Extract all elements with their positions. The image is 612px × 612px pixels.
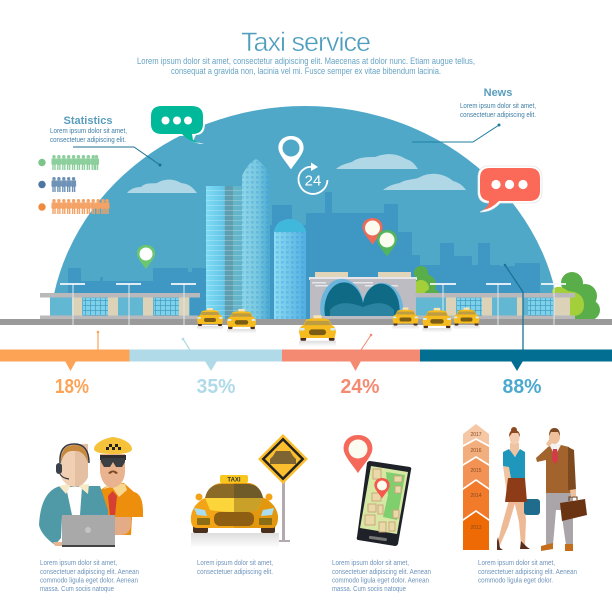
map pin: green	[137, 245, 155, 269]
text block 4: consectetuer adipiscing elit. Aenean	[478, 569, 577, 576]
text block 1: consectetuer adipiscing elit. Aenean	[40, 569, 139, 576]
text block 4: commodo ligula eget dolor.	[478, 578, 553, 584]
centre terminal	[309, 272, 417, 320]
tower right	[274, 219, 306, 320]
statistics leader line	[73, 147, 161, 166]
icon: businesswoman	[497, 427, 540, 550]
subtitle	[137, 56, 475, 76]
icon: big taxi	[191, 475, 279, 548]
text block 3	[332, 560, 431, 593]
map pin: white with 24h: 24	[305, 172, 321, 190]
icon: operator	[39, 444, 115, 547]
text block 3: consectetuer adipiscing elit. Aenean	[332, 569, 431, 576]
news heading: News	[484, 87, 512, 99]
map pin: white with 24h	[278, 136, 328, 194]
tower left	[206, 186, 243, 320]
map pin: red	[362, 218, 383, 245]
icon: smartphone with map	[344, 435, 411, 546]
subtitle: consequat a gravida non, lacinia vel mi. Fusce semper ex vitae bibendum lacinia.	[171, 66, 441, 76]
icon: big taxi: TAXI	[227, 478, 241, 484]
icon: driver	[94, 437, 143, 535]
bushes	[413, 266, 600, 320]
percent 88: 88%	[502, 376, 542, 398]
percent 24: 24%	[340, 376, 380, 398]
statistics heading: Statistics	[64, 115, 112, 127]
text block 1: massa. Cum sociis natoque	[40, 586, 114, 593]
percent 35: 35%	[196, 376, 236, 398]
connector lines	[97, 264, 523, 350]
news text: Lorem ipsum dolor sit amet,	[460, 103, 536, 110]
text block 1	[40, 560, 139, 593]
statistics text	[50, 128, 127, 144]
right terminal	[415, 293, 575, 320]
icon: year arrow stack: 2016	[470, 448, 482, 454]
segmented bar	[0, 350, 612, 371]
news leader line	[412, 124, 500, 142]
text block 1: commodo ligula eget dolor. Aenean	[40, 578, 138, 584]
icon: year arrow stack: 2015	[470, 468, 482, 474]
news text	[460, 103, 536, 119]
text block 2: consectetuer adipiscing elit.	[197, 569, 273, 576]
map pin: green 2	[377, 230, 397, 257]
skyline	[68, 192, 540, 320]
icon: year arrow stack	[463, 424, 489, 550]
text block 4: Lorem ipsum dolor sit amet,	[478, 560, 555, 567]
icon: businessman	[536, 428, 587, 551]
title: Taxi service	[241, 27, 371, 57]
statistics text: consectetuer adipiscing elit.	[50, 137, 126, 144]
city dome	[0, 106, 612, 325]
news text: consectetuer adipiscing elit.	[460, 112, 536, 119]
text block 4	[478, 560, 577, 584]
subtitle: Lorem ipsum dolor sit amet, consectetur adipiscing elit. Maecenas at dolor nunc. Etiam augue tellus,	[137, 56, 475, 66]
text block 2: Lorem ipsum dolor sit amet,	[197, 560, 273, 567]
people chart orange	[38, 199, 110, 214]
text block 3: massa. Cum sociis natoque	[332, 586, 406, 593]
people chart blue	[38, 177, 76, 192]
statistics text: Lorem ipsum dolor sit amet,	[50, 128, 127, 135]
icon: year arrow stack: 2013	[470, 525, 482, 531]
percent 18: 18%	[55, 376, 89, 398]
clouds	[127, 154, 466, 193]
icon: year arrow stack: 2017	[470, 432, 482, 438]
tower centre	[242, 159, 270, 320]
icon: taxi sign	[258, 434, 308, 542]
taxis on road	[197, 308, 480, 346]
text block 3: Lorem ipsum dolor sit amet,	[332, 560, 409, 567]
people chart green	[38, 155, 99, 170]
text block 3: commodo ligula eget dolor. Aenean	[332, 578, 429, 584]
street lamps	[60, 284, 566, 325]
icon: year arrow stack: 2014	[470, 493, 482, 499]
speech bubble: teal	[151, 106, 205, 144]
text block 2	[197, 560, 273, 576]
road	[0, 319, 612, 325]
left terminal	[40, 293, 200, 320]
speech bubble: red	[478, 166, 542, 212]
text block 1: Lorem ipsum dolor sit amet,	[40, 560, 117, 567]
